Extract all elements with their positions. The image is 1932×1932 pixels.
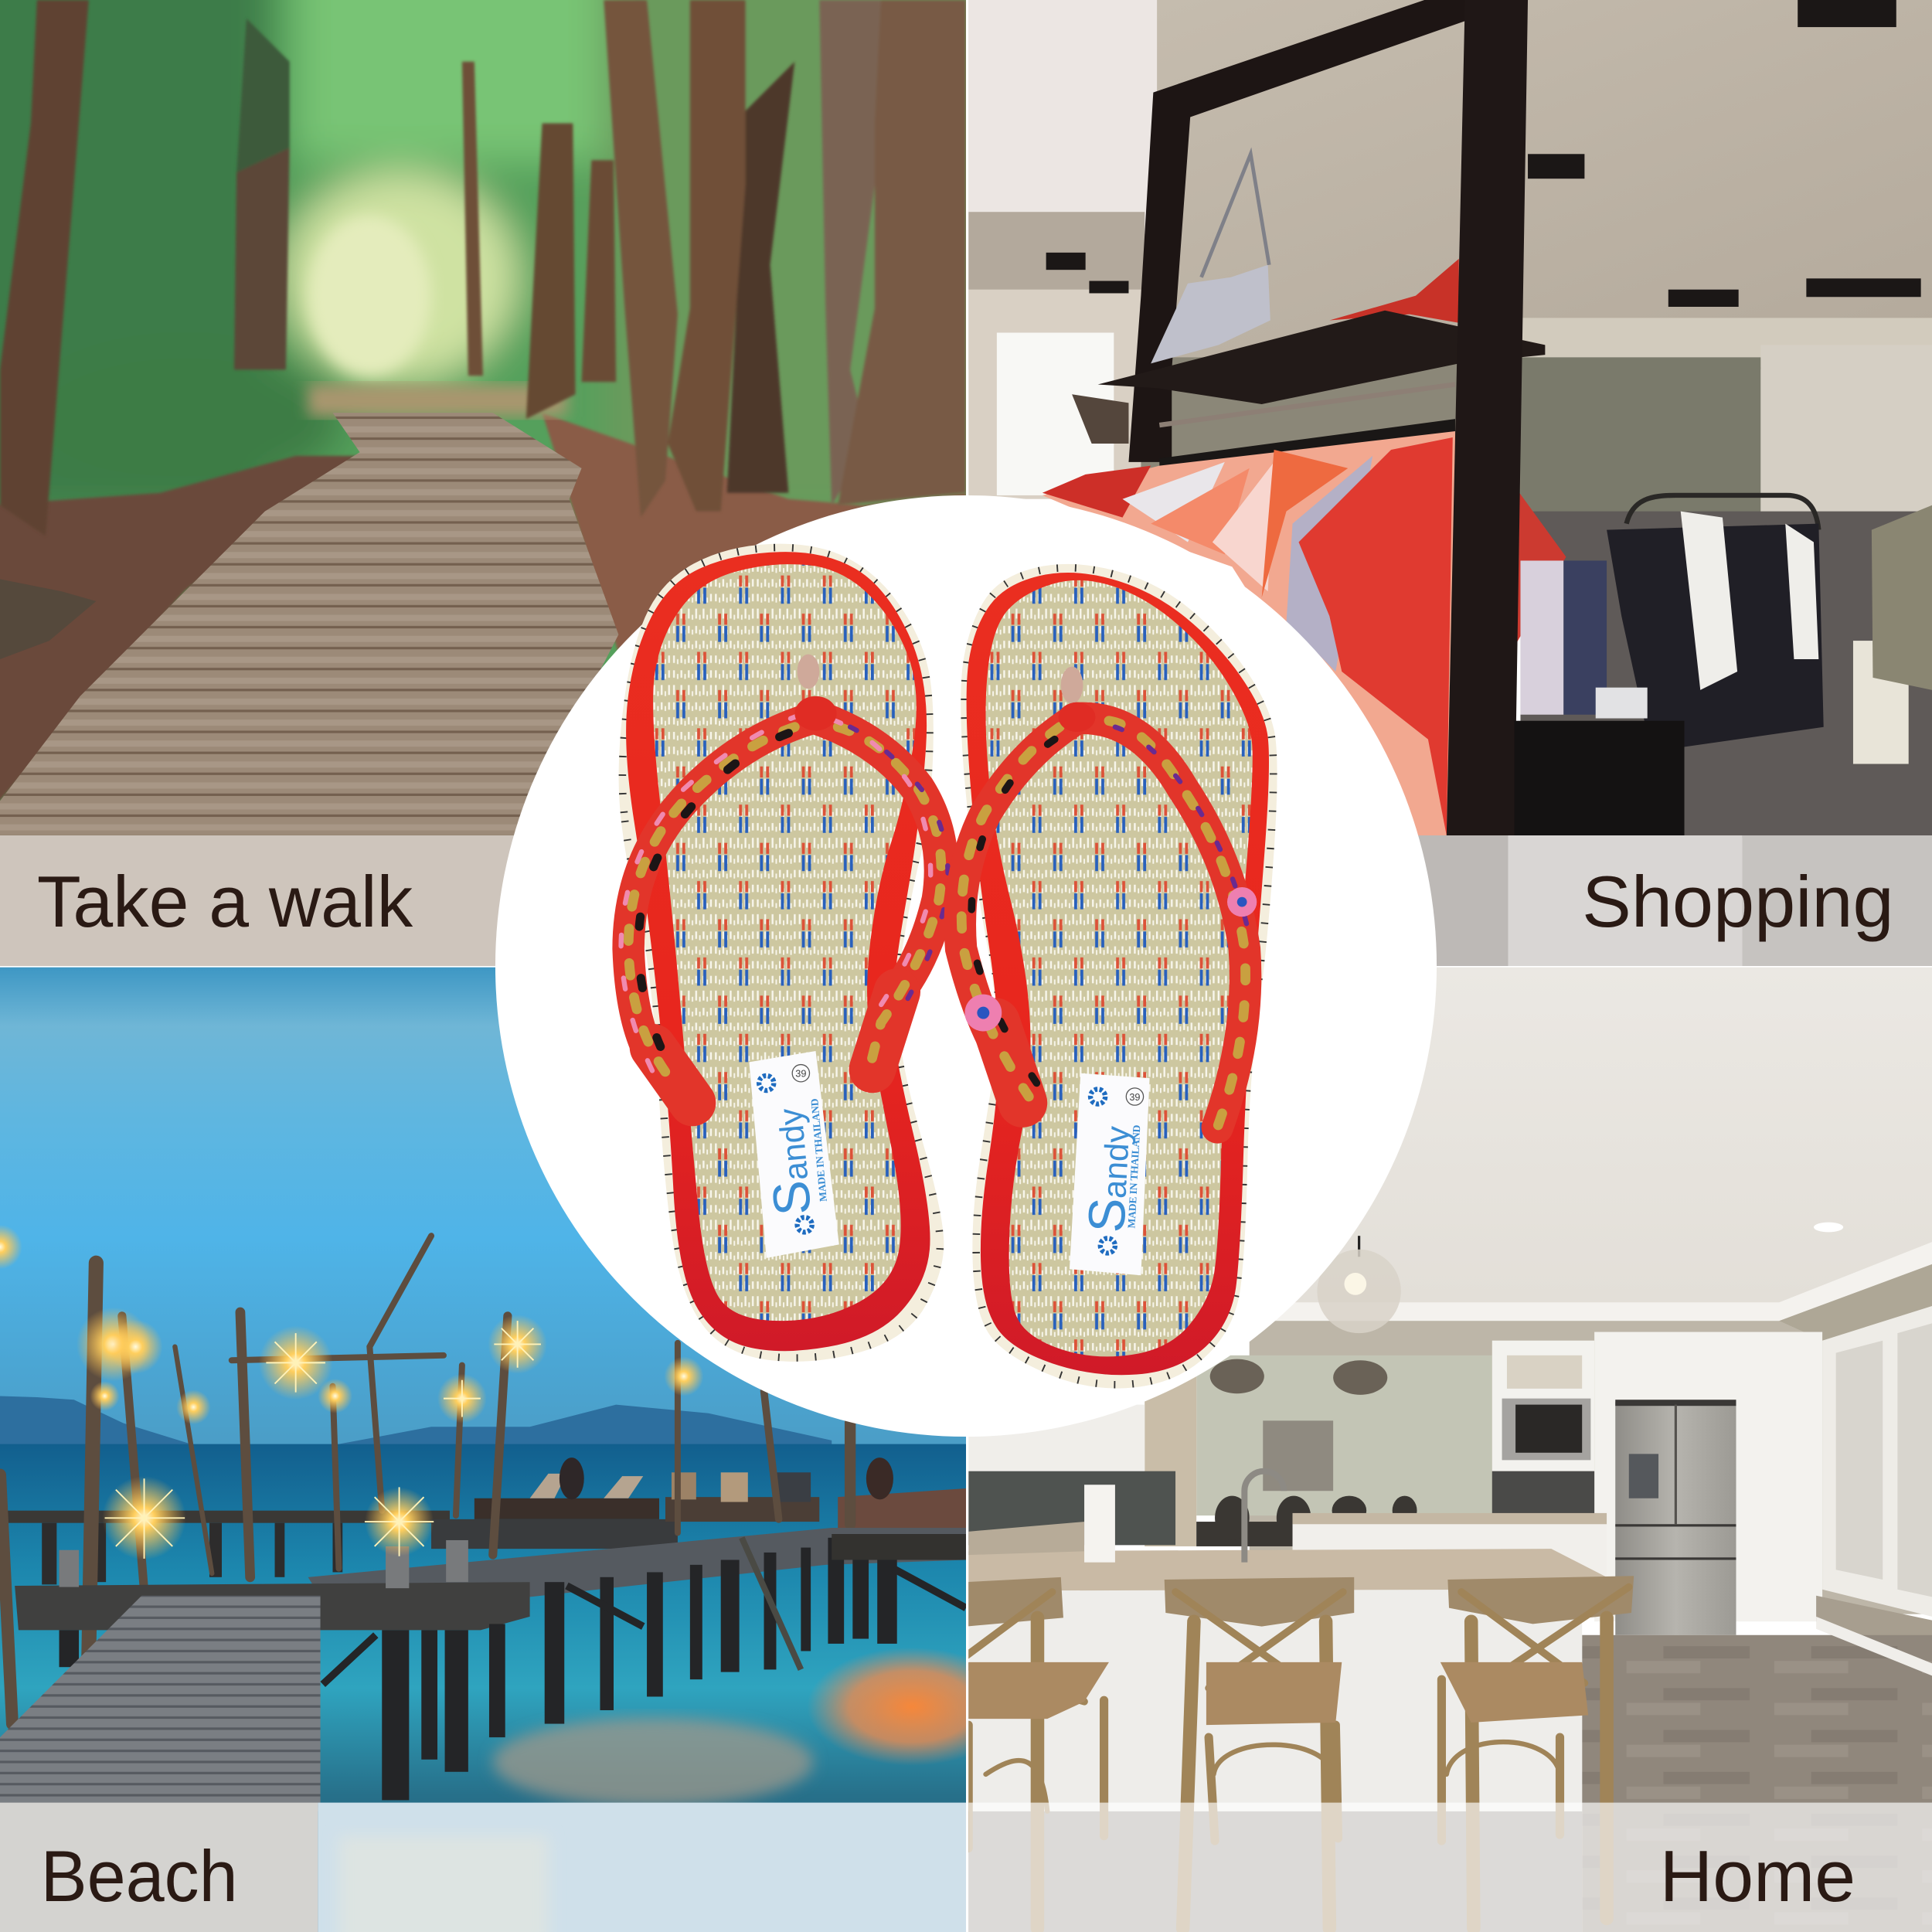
right edge stitching bbox=[961, 564, 1277, 1389]
front boardwalk bbox=[0, 1596, 321, 1811]
right woven insole bbox=[986, 580, 1253, 1356]
stool backrests bbox=[966, 1576, 1634, 1627]
left size label: 39 bbox=[795, 1067, 806, 1079]
leaning pole bbox=[742, 1538, 801, 1669]
hangers bbox=[1159, 419, 1455, 474]
refrigerator bbox=[1615, 1400, 1736, 1635]
evening sky bbox=[0, 968, 966, 1460]
boardwalk lower part bbox=[0, 835, 518, 966]
microwave bbox=[1502, 1399, 1590, 1460]
heading: shopping: Shopping bbox=[1582, 861, 1894, 942]
upper white wall bbox=[968, 0, 1157, 234]
seated guests bbox=[560, 1458, 893, 1499]
right red binding bbox=[967, 573, 1269, 1375]
pale water reflection bbox=[493, 1718, 813, 1806]
black pillar bbox=[1447, 0, 1528, 835]
right strap knot bbox=[1059, 702, 1095, 732]
garment underlay bbox=[1043, 431, 1455, 838]
panel: home bbox=[966, 968, 1932, 1932]
kitchen island bbox=[968, 1583, 1582, 1811]
tile splash right bbox=[1492, 1471, 1607, 1520]
right sandal bbox=[960, 564, 1277, 1389]
white center circle bbox=[495, 495, 1437, 1437]
bag bbox=[1151, 265, 1270, 363]
pier posts bbox=[60, 1538, 897, 1800]
ceiling light bbox=[1814, 1223, 1843, 1232]
left sole edge bbox=[619, 544, 944, 1362]
shelf bbox=[1098, 311, 1545, 404]
upper wall bbox=[1250, 1321, 1932, 1614]
heading: take a walk: Take a walk bbox=[37, 861, 413, 942]
crown molding bbox=[1274, 1242, 1932, 1321]
panel: take a walk bbox=[0, 0, 966, 966]
left counter bbox=[968, 1522, 1084, 1555]
pier braces bbox=[323, 1569, 966, 1685]
sun loungers bbox=[474, 1474, 659, 1519]
stool seats bbox=[966, 1662, 1588, 1725]
left size label: Sandy bbox=[755, 1106, 822, 1218]
left strap bbox=[621, 715, 948, 1103]
faucet bbox=[1244, 1471, 1284, 1563]
tall cabinets bbox=[1594, 1332, 1822, 1621]
walk overlay bbox=[0, 835, 514, 966]
left size label: MADE IN THAILAND bbox=[808, 1098, 829, 1202]
strap flower right bbox=[1227, 887, 1257, 917]
beach overlay left bbox=[0, 1803, 318, 1932]
right deck bbox=[832, 1534, 966, 1560]
lamp star rays bbox=[105, 1321, 541, 1559]
ceiling spots bbox=[1046, 0, 1921, 307]
small shelf bbox=[1072, 394, 1128, 444]
right wall bbox=[1760, 357, 1932, 512]
right sole edge bbox=[961, 564, 1277, 1389]
left upper cabinets bbox=[968, 1405, 1145, 1471]
hanging rail bbox=[1159, 384, 1455, 425]
left edge stitching bbox=[619, 544, 944, 1362]
heading: beach: Beach bbox=[41, 1835, 238, 1917]
right size label: MADE IN THAILAND bbox=[1125, 1124, 1142, 1229]
back jetty rail bbox=[6, 1511, 450, 1523]
fallen log bbox=[0, 579, 96, 659]
shopping overlay bbox=[1417, 835, 1932, 966]
chandeliers bbox=[1210, 1359, 1387, 1395]
granite counter bbox=[968, 1549, 1607, 1590]
pendant lamp bbox=[1317, 1236, 1401, 1333]
forest floor right bbox=[543, 413, 966, 653]
column bbox=[1145, 1355, 1196, 1546]
left red binding bbox=[626, 552, 930, 1351]
back jetty posts bbox=[42, 1523, 342, 1584]
shop floor and depth bbox=[1520, 512, 1932, 838]
lower left wall bbox=[968, 290, 1141, 499]
right upper wall bbox=[1779, 1263, 1932, 1343]
stool cross bars and legs bbox=[966, 1587, 1629, 1928]
microwave cabinet bbox=[1492, 1341, 1594, 1471]
bollards bbox=[60, 1540, 468, 1588]
area behind rail bbox=[1141, 357, 1521, 495]
tree trunks bbox=[0, 0, 966, 536]
backsplash bbox=[968, 1471, 1175, 1545]
panel: beach bbox=[0, 968, 1016, 1932]
left size label bbox=[749, 1051, 839, 1258]
back wall band bbox=[1522, 318, 1932, 357]
paper towel bbox=[1084, 1485, 1115, 1563]
bag strap bbox=[1202, 154, 1269, 277]
second deck bbox=[431, 1519, 678, 1549]
cafe chairs bbox=[665, 1472, 819, 1522]
right size label: 39 bbox=[1129, 1091, 1141, 1103]
path end clearing bbox=[308, 384, 566, 417]
black display frame bbox=[1128, 0, 1472, 462]
shop ceiling bbox=[968, 0, 1932, 369]
ceiling bbox=[968, 968, 1932, 1337]
garments on rail bbox=[1043, 437, 1566, 835]
reflection in overlay bbox=[338, 1836, 549, 1932]
left strap knot bbox=[794, 696, 837, 730]
forest floor left bbox=[0, 454, 355, 801]
black clothing rack bbox=[1515, 495, 1932, 835]
beach overlay right bbox=[318, 1803, 966, 1932]
rear kitchen counter bbox=[1293, 1513, 1607, 1582]
panel: shopping bbox=[968, 0, 1932, 966]
baseboard bbox=[1816, 1617, 1932, 1675]
cross deck bbox=[15, 1582, 530, 1630]
home overlay bbox=[968, 1803, 1932, 1932]
lower left ceiling bbox=[968, 212, 1145, 290]
sunlit clearing bbox=[308, 216, 431, 376]
microwave door bbox=[1515, 1405, 1582, 1453]
right size label: Sandy bbox=[1077, 1124, 1141, 1234]
lower wall bbox=[1816, 1596, 1932, 1671]
painting bbox=[1263, 1420, 1333, 1491]
window bbox=[997, 332, 1114, 495]
forest backdrop bbox=[0, 0, 966, 801]
warm water reflection bbox=[807, 1648, 1016, 1766]
boardwalk bbox=[0, 413, 618, 843]
strap flower left bbox=[964, 995, 1002, 1032]
dining wall bbox=[1196, 1355, 1492, 1515]
floor in front of island bbox=[968, 1811, 1582, 1932]
sea bbox=[0, 1444, 966, 1932]
windows bbox=[1822, 1306, 1932, 1617]
left sandal bbox=[619, 544, 948, 1362]
cabinet shelf bbox=[1507, 1355, 1582, 1389]
distant hills bbox=[0, 1396, 832, 1447]
heading: home: Home bbox=[1660, 1835, 1855, 1917]
left woven insole bbox=[653, 564, 917, 1321]
floor bbox=[1582, 1635, 1932, 1932]
right size label bbox=[1070, 1073, 1150, 1275]
cafe tables bbox=[838, 1488, 966, 1528]
main pier walkway bbox=[308, 1528, 966, 1597]
left toe post bbox=[798, 655, 819, 689]
window shutters bbox=[1836, 1323, 1932, 1597]
lamp glows bbox=[0, 1225, 703, 1560]
red shoes bbox=[1329, 259, 1459, 323]
glass wall bbox=[1520, 357, 1760, 518]
right strap bbox=[960, 718, 1252, 1128]
right toe post bbox=[1061, 667, 1083, 703]
driftwood lamp posts bbox=[0, 1236, 850, 1724]
dining chairs bbox=[1196, 1496, 1417, 1546]
